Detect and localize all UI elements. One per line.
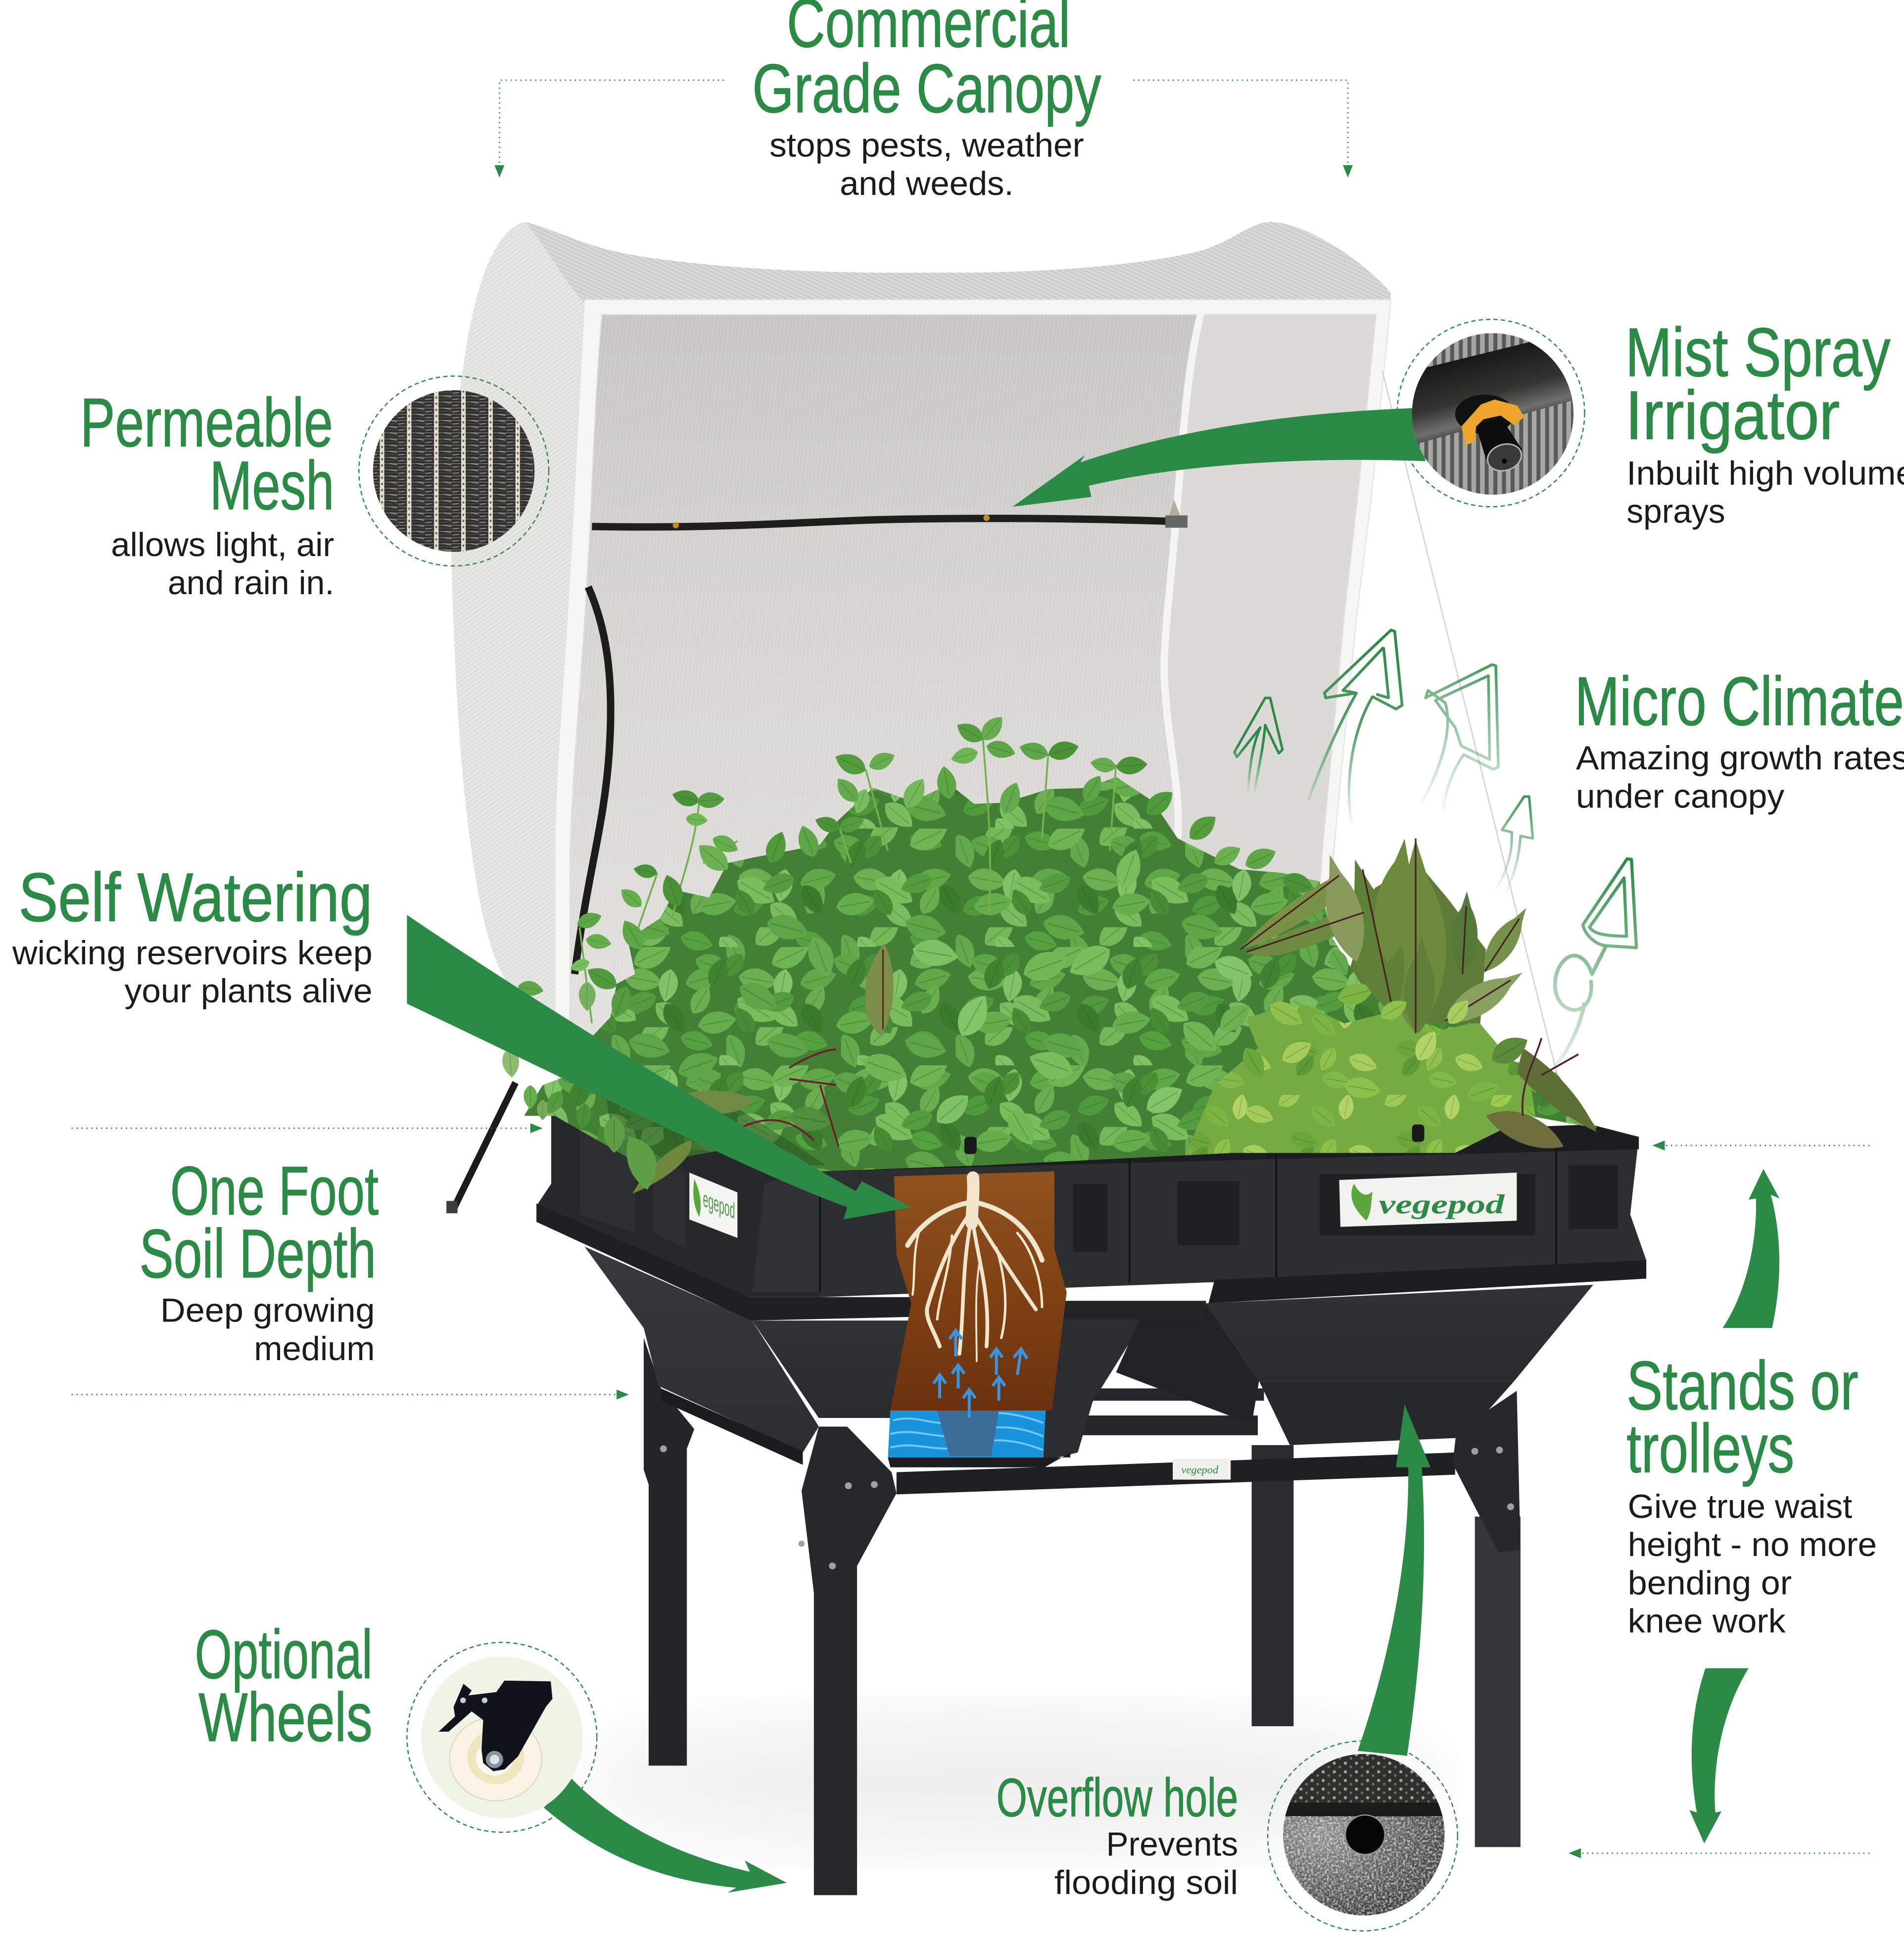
tie line <box>1382 371 1571 1131</box>
text: stands or trolleys: bending or <box>1628 1564 1792 1602</box>
text: permeable mesh <box>80 384 334 602</box>
stand top leader <box>1653 1140 1869 1150</box>
text: micro climate <box>1575 662 1904 815</box>
text: mist spray irrigator: Inbuilt high volume <box>1626 455 1904 492</box>
text: permeable mesh: and rain in. <box>168 565 334 602</box>
center funnel <box>1043 1303 1154 1461</box>
text: mist spray irrigator: Irrigator <box>1625 377 1840 454</box>
roots <box>907 1178 1042 1361</box>
arrow: wheels <box>544 1778 787 1893</box>
left funnel side <box>584 1247 819 1453</box>
text: mist spray irrigator <box>1625 314 1904 530</box>
lower shade <box>607 1099 826 1165</box>
arrow: stands up <box>1723 1169 1779 1328</box>
interior right section <box>1164 311 1381 1024</box>
support strut <box>446 1083 516 1213</box>
bolts <box>660 1445 1514 1569</box>
left funnel front <box>752 1320 914 1418</box>
lime foliage <box>1184 1005 1541 1159</box>
text: optional wheels: Wheels <box>198 1679 373 1756</box>
canopy <box>446 222 1571 1213</box>
crossbar label <box>1173 1459 1231 1480</box>
text: overflow hole <box>997 1768 1238 1901</box>
right front leg lower <box>1475 1516 1521 1847</box>
small arrow <box>1235 698 1283 794</box>
arrow: self watering <box>407 915 911 1220</box>
text: commercial grade canopy <box>752 0 1101 202</box>
arrow: stands down <box>1689 1668 1749 1843</box>
text: stands or trolleys <box>1626 1347 1877 1640</box>
lime foreground leaves <box>1243 995 1502 1128</box>
canopy left leader <box>494 80 724 178</box>
left face recesses <box>579 1128 686 1248</box>
text: self watering: wicking reservoirs keep <box>12 935 373 972</box>
right reservoir step <box>1259 1381 1514 1445</box>
text: overflow hole: Prevents <box>1106 1826 1238 1863</box>
small right arrow <box>1495 797 1533 895</box>
text: self watering <box>12 859 373 1010</box>
text: micro climate: under canopy <box>1576 778 1785 815</box>
large foreground leaves <box>674 846 1377 1150</box>
text: permeable mesh: Permeable <box>80 384 333 461</box>
text: one foot soil depth <box>140 1152 379 1367</box>
soil <box>890 1172 1067 1411</box>
soil cutaway <box>888 1169 1070 1467</box>
text: one foot soil depth: medium <box>254 1330 375 1367</box>
right drooping leaves <box>1486 1030 1597 1148</box>
sprig and edge leaves <box>501 711 1354 1153</box>
front left leg and bracket <box>802 1426 897 1895</box>
front crossbar <box>897 1453 1455 1495</box>
left face of box <box>536 1100 820 1297</box>
plants <box>501 711 1603 1193</box>
text: overflow hole: Overflow hole <box>997 1768 1238 1828</box>
black hose <box>574 587 611 974</box>
left lip <box>536 1203 914 1320</box>
text: permeable mesh: Mesh <box>210 447 334 524</box>
water reservoir <box>888 1411 1070 1467</box>
text: self watering: your plants alive <box>125 973 373 1010</box>
right lip <box>1208 1260 1646 1303</box>
canopy side panel <box>451 222 592 1042</box>
soil depth top leader <box>72 1123 543 1133</box>
stand bottom leader <box>1569 1848 1869 1858</box>
irrigation pipe <box>592 499 1188 528</box>
stand back <box>644 1338 1521 1847</box>
front face of box <box>820 1137 1646 1297</box>
text: self watering: Self Watering <box>18 859 373 936</box>
text: overflow hole: flooding soil <box>1054 1864 1238 1901</box>
micro climate arrows <box>1235 630 1636 1086</box>
canopy interior <box>558 308 1381 1085</box>
right funnel back <box>1116 1303 1259 1424</box>
floor shadow <box>579 1710 1443 1853</box>
callout circle: mesh <box>359 376 549 566</box>
text: optional wheels <box>195 1616 373 1756</box>
callout circle: mist sprayer <box>1397 319 1584 507</box>
right funnel front <box>1206 1285 1593 1381</box>
stand front <box>660 1391 1521 1895</box>
vegepod container: egepod <box>703 1186 735 1224</box>
text: one foot soil depth: Soil Depth <box>140 1215 376 1292</box>
text: commercial grade canopy: Grade Canopy <box>752 50 1101 127</box>
text: permeable mesh: allows light, air <box>111 526 334 564</box>
back left leg and bracket <box>644 1338 694 1766</box>
text: commercial grade canopy: and weeds. <box>840 165 1014 202</box>
arrow: mist spray to pipe <box>1012 408 1426 507</box>
looped arrow <box>1535 859 1636 1086</box>
blue capillary arrows <box>934 1330 1027 1418</box>
dock backing foliage <box>1344 863 1486 1030</box>
text: stands or trolleys: height - no more <box>1628 1526 1877 1563</box>
logo label front <box>1339 1173 1517 1227</box>
text: stands or trolleys: Give true waist <box>1628 1488 1853 1525</box>
canopy white frame <box>555 300 1391 1042</box>
clear water tube <box>1164 312 1201 839</box>
dock leaf veins <box>1240 839 1519 1033</box>
front right bracket <box>1453 1391 1521 1553</box>
red veined inner leaves and stems <box>672 943 894 1147</box>
text: commercial grade canopy: stops pests, weather <box>769 127 1084 164</box>
top rim <box>551 1100 1639 1172</box>
crossbar label: vegepod <box>1182 1463 1219 1476</box>
rear rails <box>1060 1388 1264 1435</box>
logo label side <box>689 1173 737 1238</box>
text: optional wheels: Optional <box>195 1616 373 1693</box>
soil depth bottom leader <box>72 1390 629 1400</box>
box corner <box>752 1167 820 1292</box>
vegepod container <box>536 1100 1646 1465</box>
logo label front: vegepod <box>1379 1189 1506 1219</box>
callout circle: wheel <box>407 1643 597 1832</box>
box clips <box>964 1125 1425 1154</box>
middle lip <box>1054 1301 1206 1320</box>
callout circle: overflow hole <box>1268 1741 1458 1931</box>
recessed panels <box>1073 1165 1618 1252</box>
wide arrow <box>1421 664 1498 814</box>
canopy top surface <box>524 222 1391 303</box>
text: micro climate: Amazing growth rates <box>1576 740 1904 777</box>
canopy right leader <box>1133 80 1353 178</box>
back right leg <box>1252 1445 1293 1726</box>
text: one foot soil depth: One Foot <box>170 1152 379 1229</box>
arrow: overflow hole <box>1358 1405 1430 1756</box>
text: mist spray irrigator: sprays <box>1626 493 1725 530</box>
side rail <box>661 1388 803 1465</box>
sprig stems <box>579 737 1116 1024</box>
text: stands or trolleys: knee work <box>1628 1603 1786 1640</box>
foliage mass <box>524 777 1597 1172</box>
text: stands or trolleys: trolleys <box>1626 1410 1794 1487</box>
tall arrow <box>1308 630 1402 824</box>
text: one foot soil depth: Deep growing <box>160 1292 375 1329</box>
dock leaves <box>1240 836 1536 1034</box>
caster wheel <box>439 1681 553 1801</box>
seams <box>820 1140 1556 1292</box>
leaves over box <box>626 1137 692 1193</box>
